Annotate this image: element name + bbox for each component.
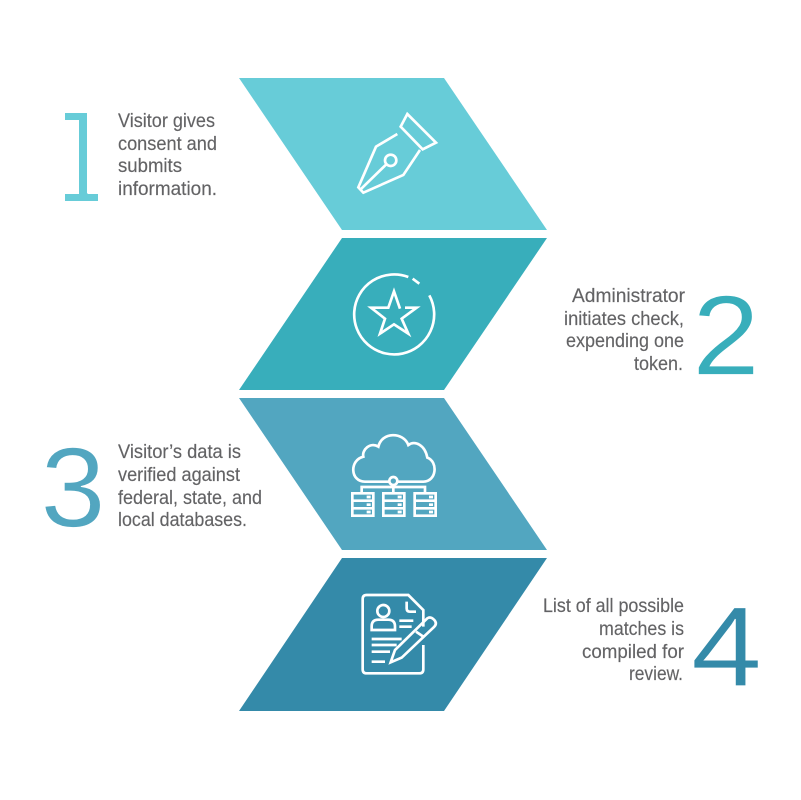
chevron 1 [239, 78, 547, 230]
text: step 3 description: federal, state, and [118, 487, 262, 509]
icon: cloud with servers [352, 435, 436, 516]
chevron 3 [239, 398, 547, 550]
text: step 4 description: matches is [599, 618, 684, 640]
text: step 1 description: submits [118, 155, 182, 177]
step 2 group [239, 238, 760, 398]
text: step 1 description: consent and [118, 133, 217, 155]
chevron 4 [239, 558, 547, 711]
text: step 2 description: initiates check, [564, 308, 684, 330]
text: step 2 description: token. [634, 353, 683, 375]
text: step 3 description: local databases. [118, 509, 247, 531]
icon: star in circle [354, 274, 434, 354]
text: step 1 description: Visitor gives [118, 110, 215, 132]
text: step 4 description: compiled for [582, 641, 684, 663]
step 4 group [239, 558, 762, 711]
text: step 2 description: expending one [566, 330, 684, 352]
step 1 group: 1 [78, 118, 88, 220]
icon: fountain pen nib [358, 114, 436, 193]
number 1 [65, 113, 98, 220]
number 3: 3 [40, 424, 106, 550]
step 3 group [40, 398, 547, 550]
text: step 4 description: List of all possible [543, 595, 684, 617]
icon: document with pen [363, 595, 436, 673]
number 4: 4 [691, 584, 762, 710]
text: step 4 description: review. [629, 663, 683, 685]
step 1 group [65, 78, 547, 230]
number 2: 2 [692, 272, 760, 398]
text: step 2 description: Administrator [572, 285, 685, 307]
text: step 3 description: verified against [118, 464, 241, 486]
chevron 2 [239, 238, 547, 390]
text: step 1 description: information. [118, 178, 217, 200]
text: step 3 description: Visitor’s data is [118, 441, 241, 463]
